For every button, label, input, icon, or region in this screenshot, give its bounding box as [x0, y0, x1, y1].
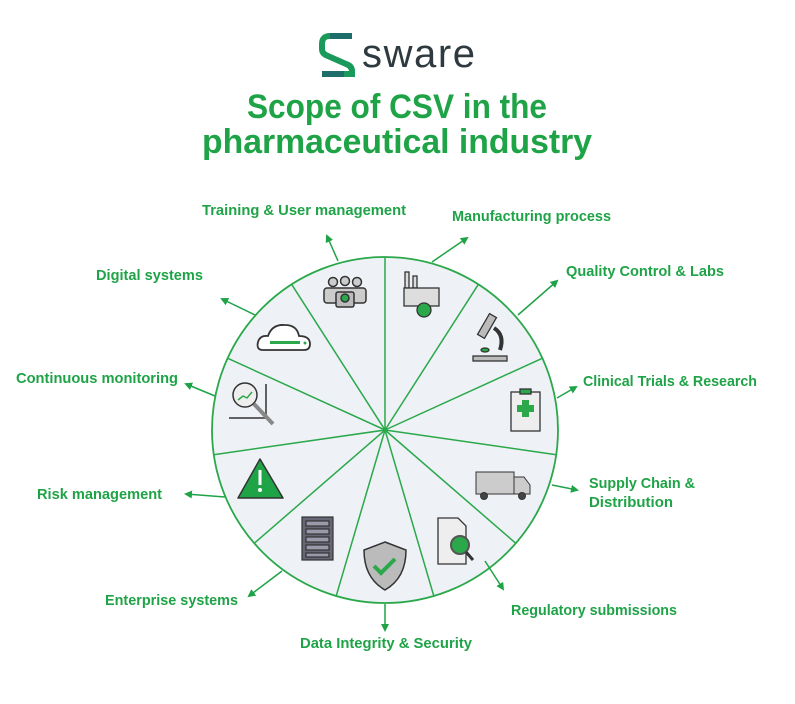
icon: warning — [238, 459, 283, 498]
icon: people — [324, 276, 366, 307]
arrows — [186, 236, 577, 630]
labels: Distribution — [589, 494, 673, 511]
icon: cloud — [258, 325, 310, 350]
labels: Risk management — [37, 486, 162, 503]
title: Scope of CSV in the — [247, 88, 547, 126]
labels — [16, 202, 757, 652]
labels: Digital systems — [96, 267, 203, 284]
labels: Training & User management — [202, 202, 406, 219]
labels: Supply Chain & — [589, 475, 695, 492]
icon: shield — [364, 542, 406, 590]
labels: Clinical Trials & Research — [583, 373, 757, 390]
icon: truck — [476, 472, 530, 500]
icon: clipboard — [511, 389, 540, 431]
labels: Manufacturing process — [452, 208, 611, 225]
labels: Data Integrity & Security — [300, 635, 473, 652]
labels: Enterprise systems — [105, 592, 238, 609]
labels: Quality Control & Labs — [566, 263, 724, 280]
icon: microscope — [473, 314, 507, 361]
icon: document — [438, 518, 473, 564]
labels: Regulatory submissions — [511, 602, 677, 619]
wheel — [212, 257, 558, 603]
icon: factory — [404, 272, 439, 317]
title — [202, 88, 592, 161]
title: pharmaceutical industry — [202, 123, 592, 161]
icon: server — [302, 517, 333, 560]
labels: Continuous monitoring — [16, 370, 178, 387]
icon: magnifier chart — [229, 383, 273, 424]
logo: sware — [362, 32, 475, 76]
